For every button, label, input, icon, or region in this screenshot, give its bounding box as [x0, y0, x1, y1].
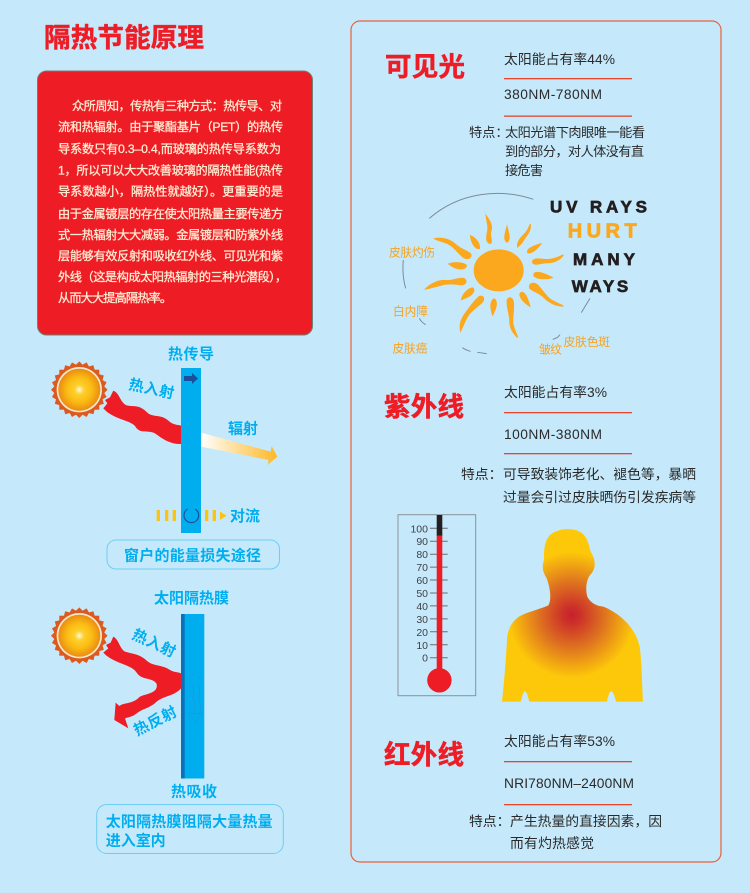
- features: 接危害: [505, 162, 543, 178]
- scale numbers: 40: [416, 601, 428, 613]
- features: 过量会引过皮肤晒伤引发疾病等: [503, 489, 696, 505]
- caption: energy loss: [107, 540, 280, 569]
- features: 可导致装饰老化、褪色等，暴晒: [503, 466, 696, 482]
- mercury column: [437, 515, 442, 536]
- scale numbers: 100: [410, 523, 428, 535]
- label: convection: 对流: [230, 507, 260, 525]
- skin damage labels: 皮肤癌: [392, 342, 428, 356]
- panel: spectrum: [351, 21, 721, 862]
- scale numbers: [410, 523, 428, 665]
- share: 太阳能占有率44%: [504, 51, 615, 67]
- section: infrared: [384, 733, 662, 851]
- illustration: UV rays hurt many ways: [389, 193, 647, 356]
- slogan text: MANY: [573, 250, 636, 269]
- skin damage labels: [389, 246, 610, 356]
- scale numbers: 60: [416, 575, 428, 587]
- section: ultraviolet: [384, 384, 696, 505]
- scale numbers: 0: [422, 653, 428, 665]
- section: visible light: [385, 51, 645, 178]
- scale numbers: 70: [416, 562, 428, 574]
- caption: film blocks heat: 太阳隔热膜阻隔大量热量: [106, 812, 273, 830]
- intro paragraph: 导系数只有0.3–0.4,而玻璃的热传导系数为: [58, 141, 281, 156]
- share: 太阳能占有率53%: [504, 733, 615, 749]
- icon: conduction arrow: [184, 373, 198, 384]
- label: incoming heat: 热入射: [129, 625, 179, 661]
- wavelength: 380NM-780NM: [504, 87, 602, 102]
- diagram: solar film: [51, 589, 283, 854]
- scale numbers: 90: [416, 536, 428, 548]
- features: [469, 813, 662, 851]
- heading: 红外线: [384, 740, 464, 770]
- intro paragraph: 流和热辐射。由于聚酯基片（PET）的热传: [58, 119, 283, 134]
- heading: heat conduction: 热传导: [168, 346, 214, 363]
- convection marks: [157, 509, 227, 523]
- features: 而有灼热感觉: [510, 835, 594, 851]
- scale numbers: 30: [416, 614, 428, 626]
- icon: stylised sun: [426, 216, 563, 337]
- intro paragraph: 从而大大提高隔热率。: [58, 290, 172, 305]
- absorbed heat arrow: [188, 674, 203, 723]
- reflected heat wave: [103, 637, 181, 728]
- scale numbers: 10: [416, 640, 428, 652]
- share: 太阳能占有率3%: [504, 384, 607, 400]
- icon: sun: [51, 607, 108, 664]
- features: [461, 466, 696, 505]
- features: 特点：: [469, 814, 510, 829]
- slogan text: [550, 198, 647, 296]
- caption: energy loss: 窗户的能量损失途径: [124, 546, 261, 564]
- intro paragraph: 1，所以可以大大改善玻璃的隔热性能(热传: [58, 162, 283, 178]
- scale numbers: 80: [416, 549, 428, 561]
- intro paragraph: 式一热辐射大大减弱。金属镀层和防紫外线: [58, 227, 283, 242]
- features: 产生热量的直接因素，因: [510, 813, 662, 829]
- film bar: [181, 614, 204, 778]
- scale numbers: 50: [416, 588, 428, 600]
- slogan text: HURT: [568, 220, 637, 242]
- slogan text: WAYS: [572, 277, 628, 296]
- intro paragraph: 外线（这是构成太阳热辐射的三种光潜段），: [58, 269, 287, 284]
- panel: intro text: [38, 71, 312, 335]
- caption: film blocks heat: [97, 804, 283, 854]
- skin damage labels: 白内障: [393, 304, 428, 318]
- features: [469, 125, 645, 178]
- label: radiation: 辐射: [228, 420, 258, 438]
- illustration: body heat map: [502, 529, 643, 702]
- incoming heat wave: [103, 391, 181, 444]
- label: reflected heat: 热反射: [131, 703, 180, 740]
- features: 到的部分，对人体没有直: [505, 144, 644, 159]
- title: 隔热节能原理: [44, 23, 204, 53]
- caption: film blocks heat: 进入室内: [106, 832, 166, 850]
- features: 太阳光谱下肉眼唯一能看: [505, 125, 645, 140]
- wavelength: NRI780NM–2400NM: [504, 776, 634, 791]
- features: 特点：: [469, 125, 509, 140]
- heading: solar film: 太阳隔热膜: [154, 589, 229, 607]
- skin damage labels: 皱纹: [539, 342, 562, 356]
- skin damage labels: 皮肤色斑: [564, 335, 610, 349]
- features: 特点：: [461, 467, 502, 482]
- chart: thermometer: [398, 515, 476, 696]
- label: incoming heat: 热入射: [127, 375, 176, 402]
- wavelength: 100NM-380NM: [504, 427, 602, 442]
- scale ticks: [430, 528, 448, 658]
- radiation arrow: [201, 433, 277, 465]
- skin damage labels: 皮肤灼伤: [389, 246, 435, 260]
- slogan text: UV RAYS: [550, 198, 647, 216]
- diagram: window energy loss: [51, 346, 280, 569]
- label: heat absorption: 热吸收: [171, 784, 217, 800]
- intro paragraph: 由于金属镀层的存在使太阳热量主要传递方: [58, 206, 283, 221]
- scale numbers: 20: [416, 627, 428, 639]
- intro paragraph: 众所周知，传热有三种方式：热传导、对: [72, 98, 282, 113]
- window glass bar: [181, 368, 201, 533]
- intro paragraph: 层能够有效反射和吸收红外线、可见光和紫: [58, 248, 283, 263]
- heading: 紫外线: [384, 392, 464, 422]
- icon: sun: [51, 361, 108, 418]
- heading: 可见光: [385, 52, 465, 82]
- intro paragraph: [58, 98, 287, 305]
- intro paragraph: 导系数越小，隔热性就越好）。更重要的是: [58, 184, 283, 198]
